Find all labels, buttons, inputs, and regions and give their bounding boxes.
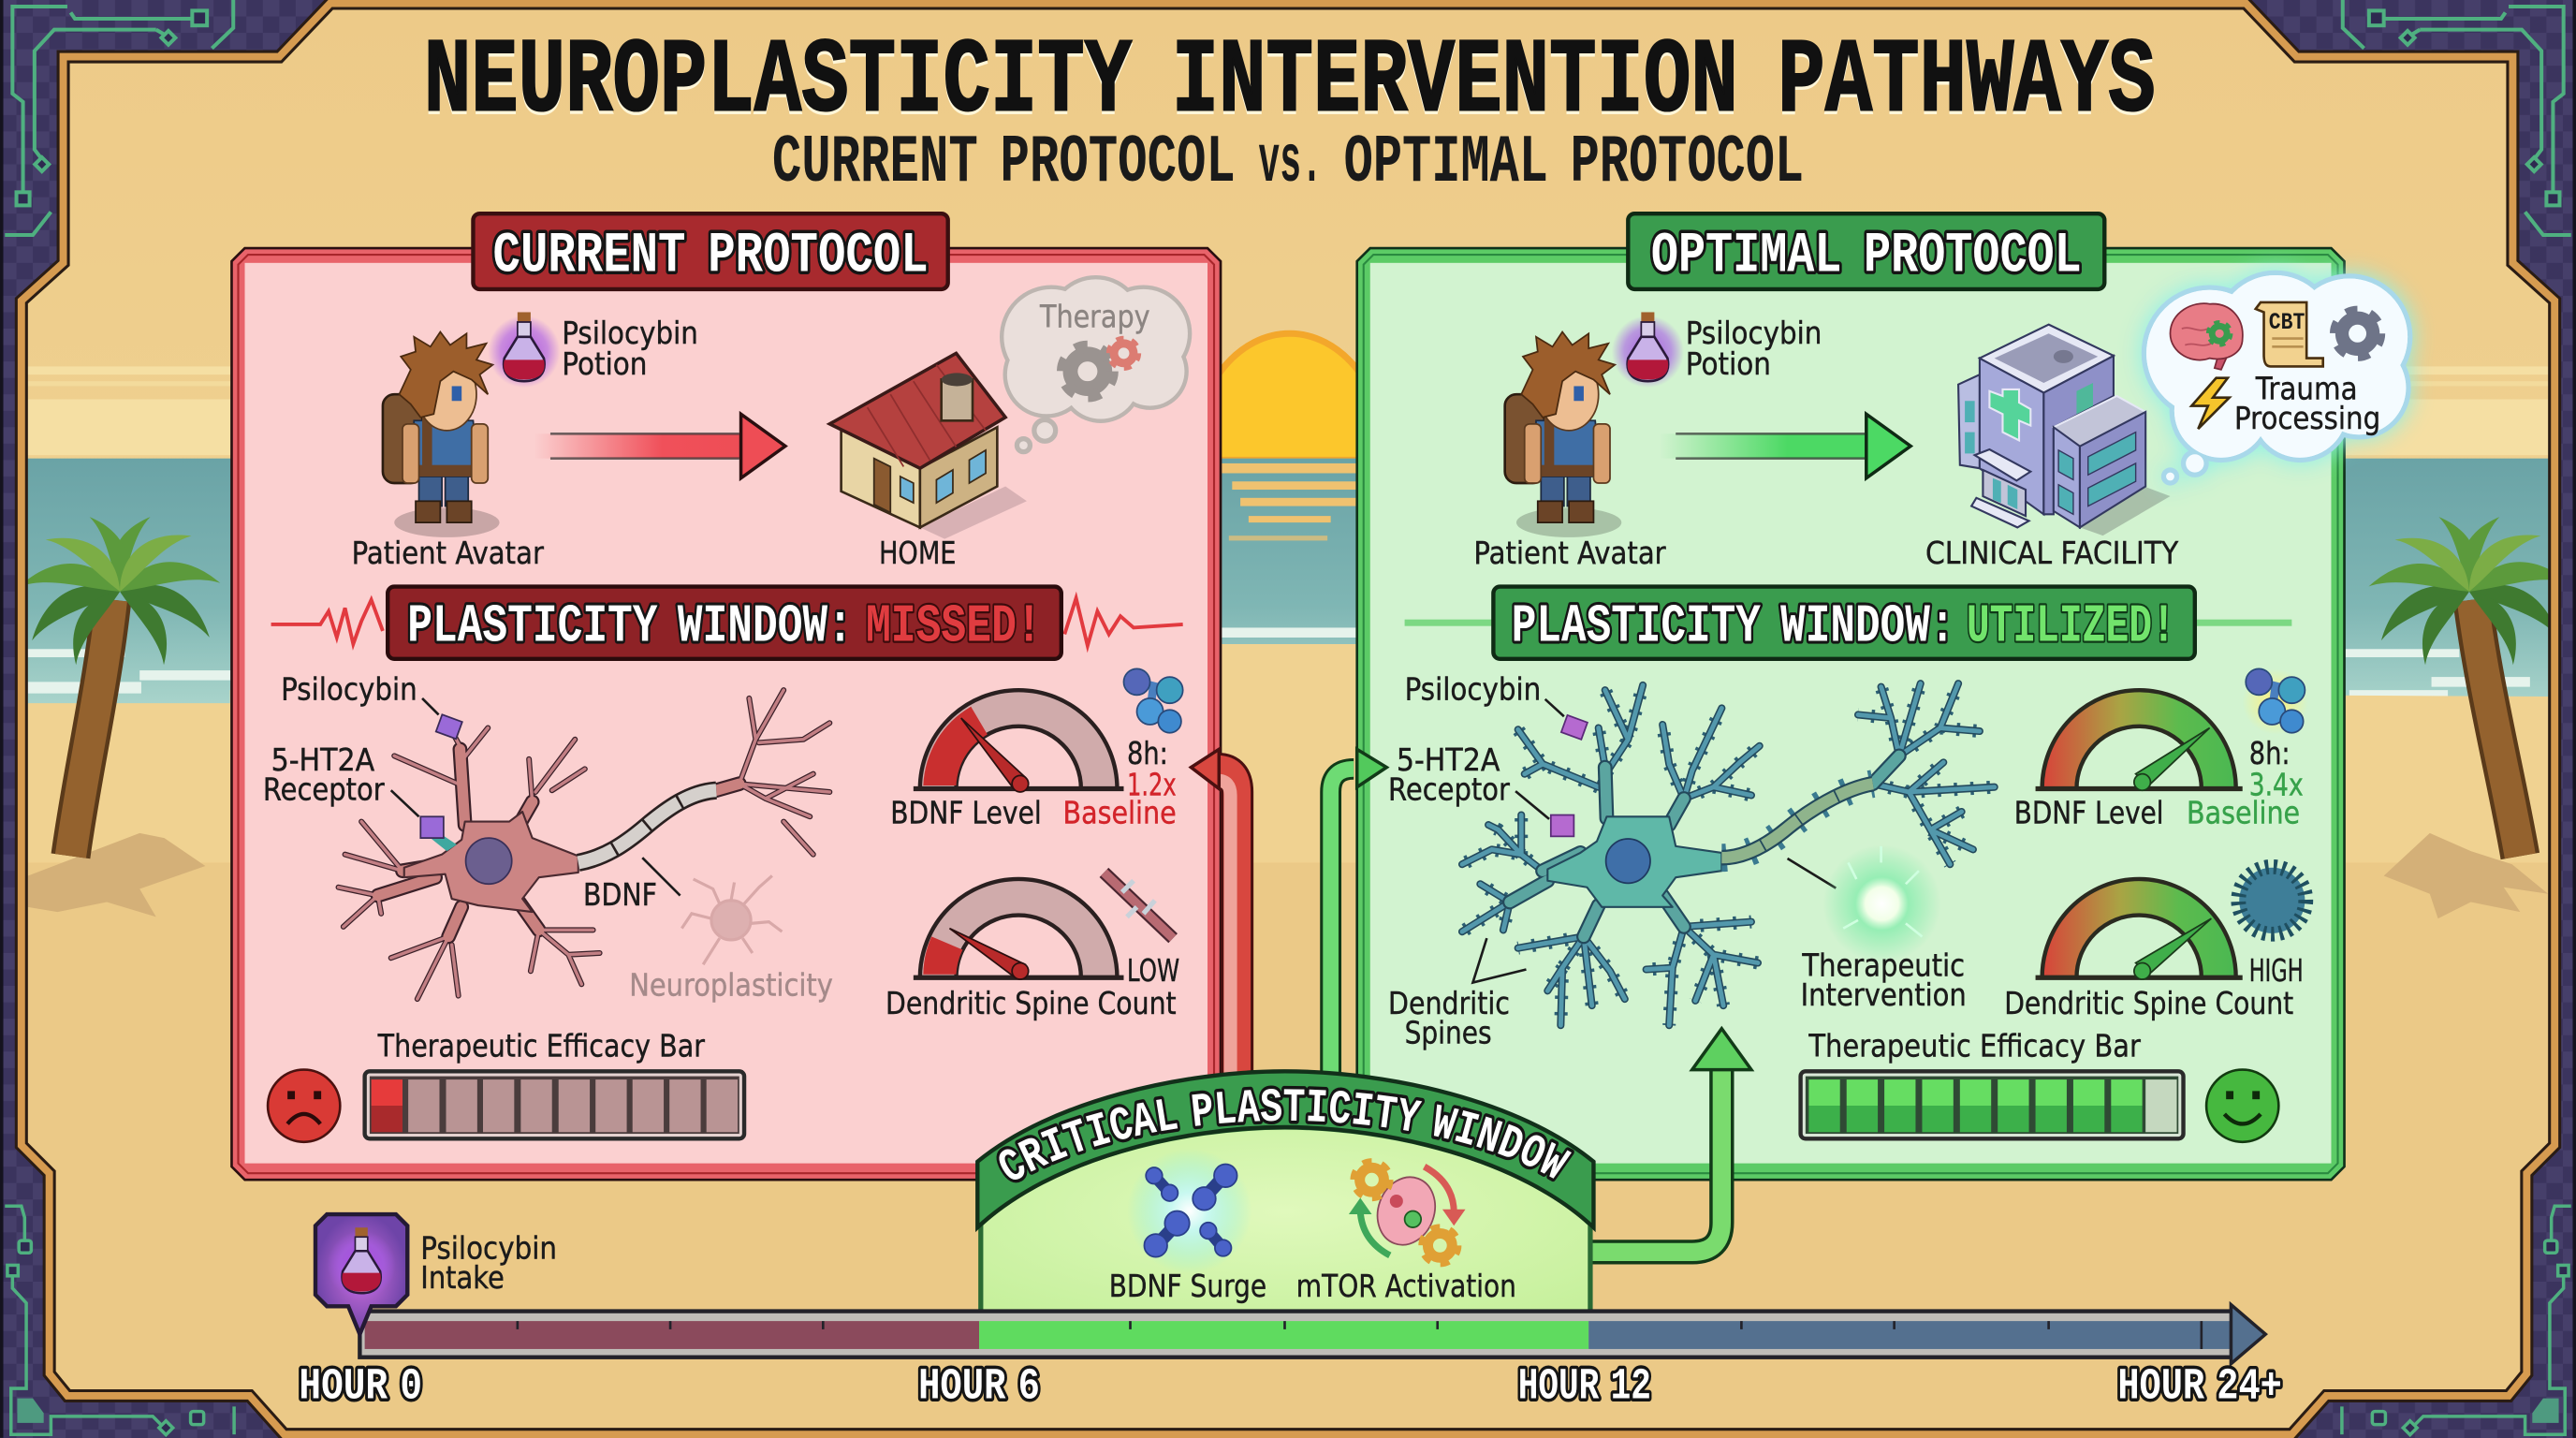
ghost neuron <box>681 875 782 964</box>
palm shadows <box>28 833 2548 918</box>
phase: post-window <box>1588 1321 2234 1349</box>
gauge spine labels: LOW <box>1127 952 1179 989</box>
neuron labels: BDNF <box>583 876 657 913</box>
hour labels: HOUR 0 <box>299 1363 422 1413</box>
neuron: weak <box>339 690 829 999</box>
cloud label <box>2234 370 2380 436</box>
efficacy bar: high <box>1801 1071 2184 1138</box>
subtitle: OPTIMAL PROTOCOL <box>1344 125 1804 201</box>
hour labels: HOUR 6 <box>918 1363 1040 1413</box>
gauge BDNF values: Baseline <box>1063 794 1177 830</box>
glow line right <box>2197 620 2291 626</box>
label: home: HOME <box>879 535 956 571</box>
label: mTOR activation: mTOR Activation <box>1296 1268 1516 1304</box>
potion <box>1612 312 1684 388</box>
cloud label: Trauma <box>2255 370 2358 406</box>
phase: critical window <box>979 1321 1588 1349</box>
gauge BDNF values <box>2014 735 2304 830</box>
banner: plasticity window utilized: UTILIZED! <box>1967 596 2175 657</box>
neuron labels: Receptor <box>1388 771 1510 808</box>
panel heading: OPTIMAL PROTOCOL <box>1651 225 2082 289</box>
horizon bands <box>0 366 2576 455</box>
sea foam <box>26 627 2530 698</box>
label: BDNF surge: BDNF Surge <box>1109 1268 1266 1304</box>
panel: optimal protocol <box>1357 213 2410 1180</box>
panel: current protocol <box>231 213 1221 1180</box>
icon: sad face <box>268 1070 340 1142</box>
icon: mTOR activation <box>1349 1163 1466 1263</box>
gauge BDNF values: BDNF Level <box>890 794 1042 830</box>
arrow: critical window to missed plasticity <box>1191 749 1237 1093</box>
avatar label: Patient Avatar <box>1473 535 1666 571</box>
label: therapeutic intervention: Intervention <box>1801 976 1967 1013</box>
label: therapeutic intervention: Therapeutic <box>1801 947 1965 984</box>
potion label: Psilocybin <box>1686 315 1822 351</box>
gauge: BDNF level <box>914 690 1123 792</box>
gauge BDNF values <box>890 735 1177 830</box>
gauge: dendritic spine count <box>914 879 1123 979</box>
banner: plasticity window missed: PLASTICITY WINDOW: <box>407 596 853 657</box>
gauge spine labels <box>2004 952 2304 1021</box>
icon: brain <box>2170 303 2243 370</box>
icon: home <box>829 353 1027 539</box>
cloud label: Processing <box>2234 400 2380 436</box>
icon: clinical facility <box>1958 325 2170 536</box>
window title: CRITICAL PLASTICITY WINDOW <box>996 1086 1574 1183</box>
icon: BDNF surge <box>1127 1149 1251 1273</box>
neuron labels <box>1388 671 1836 1050</box>
neuron labels: Receptor <box>263 771 385 808</box>
icon: glowing molecule <box>2243 668 2308 735</box>
right palm <box>2369 510 2569 856</box>
window body <box>981 1127 1590 1314</box>
gauge: dendritic spine count <box>2036 879 2243 979</box>
neuron labels: 5-HT2A <box>271 741 374 778</box>
sea <box>0 459 2576 705</box>
potion label: Psilocybin <box>562 315 698 351</box>
gauge BDNF values: Baseline <box>2187 794 2300 830</box>
arrow: critical window to utilized plasticity <box>1331 749 1386 1093</box>
neuron labels: 5-HT2A <box>1397 741 1500 778</box>
icon: CBT scroll <box>2256 302 2323 366</box>
heartbeat line right <box>1064 598 1183 646</box>
thought cloud: therapy: Therapy <box>1039 298 1150 334</box>
sun <box>1193 333 1386 460</box>
patient avatar <box>1505 332 1621 537</box>
potion label: Potion <box>562 345 648 382</box>
subtitle: vs. <box>1258 125 1323 201</box>
panel heading: CURRENT PROTOCOL <box>493 225 929 289</box>
gauge: BDNF level <box>2036 690 2243 790</box>
thought cloud: trauma processing <box>2144 272 2410 483</box>
label: therapeutic intervention <box>1801 947 1967 1013</box>
arrow to home <box>534 414 785 478</box>
hour labels: HOUR 24+ <box>2117 1363 2282 1413</box>
timeline arrowhead <box>2231 1305 2265 1364</box>
sun reflection <box>1221 463 1357 540</box>
icon: dense spines <box>2239 868 2305 933</box>
pin: psilocybin intake <box>315 1214 407 1334</box>
label: psilocybin intake <box>420 1229 557 1296</box>
panel box <box>1357 248 2345 1180</box>
neuron labels: Spines <box>1405 1014 1492 1050</box>
label: neuroplasticity: Neuroplasticity <box>629 967 833 1004</box>
avatar label: Patient Avatar <box>352 535 544 571</box>
gauge spine labels: Dendritic Spine Count <box>2004 985 2293 1021</box>
panel box <box>231 248 1221 1180</box>
patient avatar <box>383 332 500 537</box>
gauge BDNF values: BDNF Level <box>2014 794 2163 830</box>
icon: sparse spines <box>1104 873 1173 938</box>
label: clinical facility: CLINICAL FACILITY <box>1925 535 2179 571</box>
efficacy bar: low <box>365 1071 744 1138</box>
potion label <box>562 315 698 382</box>
banner: plasticity window utilized: PLASTICITY WINDOW: <box>1512 596 1955 657</box>
critical plasticity window <box>975 1069 1596 1309</box>
left palm <box>20 510 221 856</box>
heartbeat line left <box>271 600 383 644</box>
phase: pre-window <box>365 1321 979 1349</box>
hour labels <box>299 1363 2282 1413</box>
window arch banner <box>977 1071 1593 1227</box>
receptor: 5-HT2A <box>391 790 457 851</box>
gauge BDNF values: 1.2x <box>1127 766 1177 802</box>
potion <box>488 312 560 388</box>
efficacy bar label: Therapeutic Efficacy Bar <box>377 1028 705 1064</box>
hour labels: HOUR 12 <box>1518 1363 1651 1413</box>
therapeutic intervention orb <box>1822 844 1941 962</box>
timeline <box>299 1214 2282 1413</box>
neuron: flourishing <box>1462 683 1995 1025</box>
banner: plasticity window utilized <box>1493 587 2195 659</box>
label: psilocybin intake: Psilocybin <box>420 1229 557 1266</box>
label: psilocybin intake: Intake <box>420 1259 505 1296</box>
receptor: psilocybin <box>422 698 462 739</box>
sand <box>0 644 2576 1438</box>
neuron labels: Psilocybin <box>1405 671 1541 708</box>
thought cloud: therapy <box>1003 278 1190 452</box>
neuron labels: Dendritic <box>1388 985 1510 1021</box>
arrow to facility <box>1660 414 1910 478</box>
gauge BDNF values: 8h: <box>1127 735 1168 771</box>
gauge spine labels <box>886 952 1179 1021</box>
icon: smiling face <box>2206 1070 2278 1142</box>
subtitle <box>772 125 1804 201</box>
glow line left <box>1405 620 1493 626</box>
receptor: psilocybin <box>1545 699 1588 740</box>
gauge BDNF values: 8h: <box>2249 735 2291 771</box>
neuron labels <box>263 671 681 913</box>
icon: molecule <box>1123 668 1183 733</box>
potion label: Potion <box>1686 345 1771 382</box>
sky <box>0 0 2576 460</box>
receptor: 5-HT2A <box>1515 791 1573 836</box>
gauge BDNF values: 3.4x <box>2249 766 2304 802</box>
timeline track <box>359 1312 2236 1357</box>
neuron labels: Psilocybin <box>281 671 417 708</box>
panel heading <box>1628 213 2104 289</box>
efficacy bar label: Therapeutic Efficacy Bar <box>1808 1028 2141 1064</box>
timeline ticks <box>518 1321 2202 1349</box>
gauge spine labels: Dendritic Spine Count <box>886 985 1177 1021</box>
icon: gear <box>2335 312 2379 356</box>
icon: CBT scroll: CBT <box>2269 311 2305 336</box>
subtitle: CURRENT PROTOCOL <box>772 125 1236 201</box>
icon: lightning <box>2191 378 2230 429</box>
arrow: critical window up to optimal neuron <box>1590 1029 1751 1252</box>
potion label <box>1686 315 1822 382</box>
gauge spine labels: HIGH <box>2249 952 2304 989</box>
banner: plasticity window missed: MISSED! <box>866 596 1042 657</box>
